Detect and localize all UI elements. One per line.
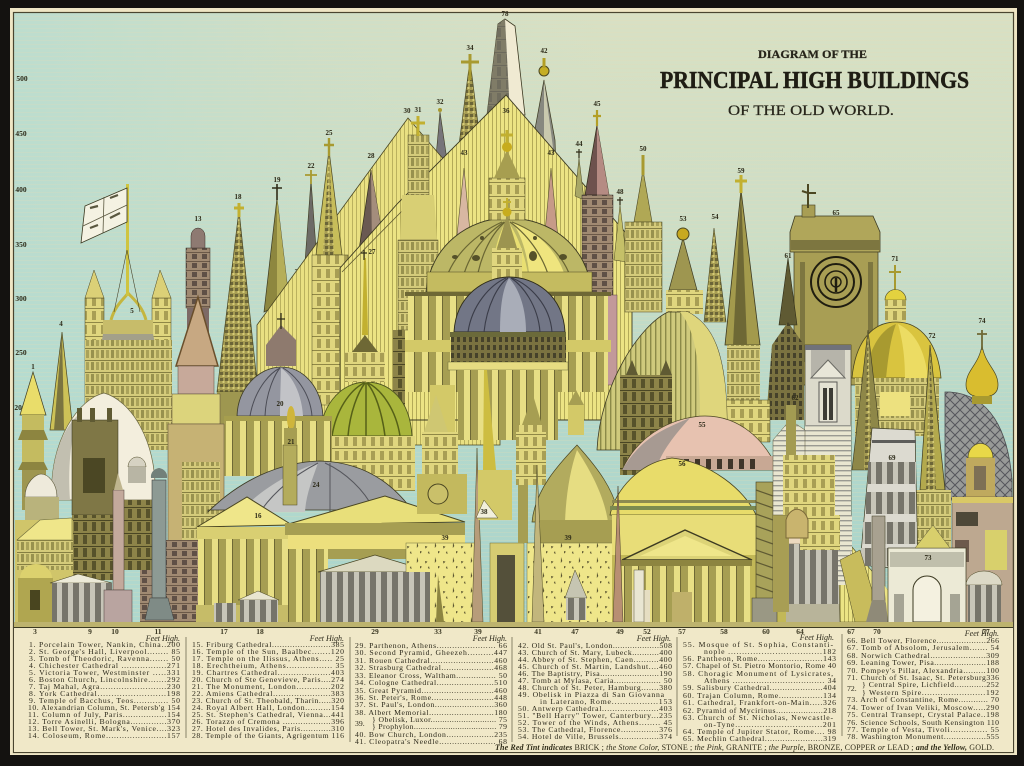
46 Baptistry dome: [532, 390, 620, 545]
13 Bell Tower St Mark's brick: 13: [194, 215, 202, 223]
legend column 3: 36. St. Peter's, Rome.........................448: [355, 693, 507, 702]
Dome of St Peter's Rome: 36: [502, 107, 510, 115]
building index numbers along ground: 18: [256, 627, 264, 636]
legend column 3: 40. Bow Church, London...................235: [355, 730, 507, 739]
28 spire on second pyramid: 28: [368, 152, 375, 160]
11 Column of July: [145, 468, 174, 620]
legend column 1: 5. Victoria Tower, Westminster .....331: [29, 668, 180, 677]
legend column 4: 51. "Bell Harry" Tower, Canterbury...235: [518, 711, 672, 720]
50 Antwerp Cathedral tower: 50: [640, 145, 647, 153]
19 Chartres spire: 19: [274, 176, 281, 184]
6 Boston Church tower: [72, 408, 118, 580]
64 Temple of Jupiter Stator: [786, 515, 844, 622]
45 Church of St Martin Landshut: [582, 100, 617, 385]
legend column 2: 16. Temple of the Sun, Baalbec.......120: [192, 647, 344, 656]
48 Church of St Peter Hamburg spire and side panel: 48: [616, 188, 624, 196]
4 Chichester spire: 4: [59, 320, 63, 328]
height scale: 400: [15, 185, 27, 194]
legend column 1: 8. York Cathedral.........................198: [29, 689, 180, 698]
legend column 6: 70. Pompey's Pillar, Alexandria.........100: [847, 666, 999, 675]
73 Arch of Constantine: 73: [924, 554, 932, 562]
building index numbers along ground: 47: [571, 627, 579, 636]
legend column 6: 73. Arch of Constantine, Rome............ 70: [847, 695, 999, 704]
building index numbers along ground: 9: [88, 627, 92, 636]
legend column 1: 14. Coloseum, Rome.......................157: [28, 731, 180, 740]
57 arched dome Church of St Peter: [597, 312, 727, 475]
legend column 2: 27. Hotel des Invalides, Paris............310: [192, 724, 344, 733]
49 Obelisk and 33 Eleanor Cross: [472, 448, 483, 622]
legend column 4: 43. Church of St. Mary, Lubeck...........400: [518, 648, 672, 657]
legend column 6: 77. Temple of Vesta, Tivoli.............. 55: [847, 725, 999, 734]
22 Amiens spire: 22: [308, 162, 315, 170]
legend column 2: 28. Temple of the Giants, Agrigentum 116: [192, 731, 344, 740]
39 Obelisk Luxor and Propylon left panel: 39: [442, 534, 449, 542]
18 Church of St Theobald spire: 18: [234, 193, 242, 201]
37 St Paul's dome and drum: [430, 277, 568, 445]
legend column 5: Feet High.: [799, 633, 834, 642]
74 Tower of Ivan Veliki: [966, 317, 998, 404]
legend column 5: nople ..................................182: [704, 647, 836, 656]
legend column 6: 76. Science Schools, South Kensington 110: [847, 718, 999, 727]
building index numbers along ground: 10: [111, 627, 119, 636]
legend column 3: Feet High.: [472, 634, 507, 643]
title block: DIAGRAM OF THE: [758, 47, 867, 61]
legend column 1: 13. Bell Tower, St. Mark's, Venice....323: [28, 724, 180, 733]
23 spire: 23: [294, 268, 302, 276]
ground line: [14, 622, 1013, 627]
building index numbers along ground: 60: [762, 627, 770, 636]
legend column 3: 35. Great Pyramid.............................460: [355, 686, 507, 695]
13 Bell Tower St Mark's brick: [172, 215, 220, 424]
legend column 1: 11. Column of July, Paris.................154: [28, 710, 180, 719]
legend column 3: } Prophylon.................................... 79: [372, 722, 507, 731]
legend column 3: 29. Parthenon, Athens....................... 66: [355, 641, 507, 650]
legend column 6: 78. Washington Monument.................555: [847, 732, 999, 741]
75 Crystal Palace transept: [945, 392, 1012, 500]
55 Mosque of St Sophia: 55: [698, 421, 706, 429]
legend column 3: 41. Cleopatra's Needle...................... 68: [355, 737, 507, 746]
flag and pole: [81, 184, 140, 312]
1 Porcelain Tower: 1: [31, 363, 35, 371]
42 Old St Paul's spire: 42: [540, 47, 548, 55]
58 Choragic Monument: [634, 570, 644, 622]
14 Coloseum: [140, 424, 224, 622]
building index numbers along ground: 67: [847, 627, 855, 636]
35 Great Pyramid: [340, 95, 632, 420]
Tower beside Albert Memorial: [516, 395, 546, 543]
25 St Stephen's Vienna tower: [312, 129, 348, 405]
legend column 1: 1. Porcelain Tower, Nankin, China..200: [29, 640, 180, 649]
legend column 2: 22. Amiens Cathedral......................383: [192, 689, 344, 698]
building index numbers along ground: 52: [643, 627, 651, 636]
30 Second Pyramid: 30: [404, 107, 411, 115]
legend column 6: 68. Norwich Cathedral......................309: [847, 651, 999, 660]
legend column 2: 15. Friburg Cathedral.......................385: [192, 640, 344, 649]
height scale: 450: [15, 129, 27, 138]
legend column 1: 9. Temple of Bacchus, Teos............. 50: [29, 696, 180, 705]
20 Church of Ste Genevieve dome: 20: [276, 400, 284, 408]
building index numbers along ground: 17: [220, 627, 228, 636]
legend column 5: 59. Salisbury Cathedral.....................404: [683, 683, 836, 692]
18 Church of St Theobald spire: [217, 193, 258, 442]
31 Rouen Cathedral tower: 31: [414, 106, 422, 114]
39 Propylon right panel: 39: [564, 534, 572, 542]
legend column 1: Feet High.: [145, 634, 180, 643]
legend column 5: 58. Choragic Monument of Lysicrates,: [683, 669, 833, 678]
legend column 3: 37. St. Paul's, London........................360: [355, 700, 507, 709]
legend column 5: on-Tyne................................201: [704, 720, 836, 729]
59 Salisbury Cathedral spire: [717, 167, 770, 442]
building index numbers along ground: 64: [796, 627, 804, 636]
small yellow dome right: [966, 443, 995, 498]
building index numbers along ground: 58: [720, 627, 728, 636]
legend column 4: 54. Hotel de Ville, Brussels................374: [518, 732, 672, 741]
legend column 4: 53. The Cathedral, Florence...............376: [518, 725, 672, 734]
Temple of Erechtheum small temples 17 and 18: [214, 591, 279, 622]
76 Science Schools: [952, 497, 1013, 625]
47 Tomb at Mylasa: [565, 570, 587, 620]
1 Porcelain Tower: [18, 363, 48, 510]
40 Bow Church tower: [417, 395, 467, 514]
39 Obelisk Luxor and Propylon left panel: [320, 534, 475, 623]
69 Leaning Tower of Pisa: 69: [888, 454, 896, 462]
building index numbers along ground: 3: [33, 627, 37, 636]
legend column 6: 74. Tower of Ivan Veliki, Moscow.....290: [847, 703, 999, 712]
65 Mechlin Cathedral tower with clock: 65: [832, 209, 840, 217]
legend column 4: 48. Church of St. Peter, Hamburg.......380: [518, 683, 672, 692]
61 Cathedral Frankfort: 61: [784, 252, 792, 260]
45 Church of St Martin Landshut: 45: [594, 100, 601, 108]
legend column 4: Feet High.: [636, 634, 671, 643]
62 Pyramid of Mycerinus slope: [838, 530, 914, 622]
77 Temple of Vesta: [966, 571, 1002, 622]
legend column 6: 66. Bell Tower, Florence....................266: [847, 636, 999, 645]
10 Alexandrian Column: [104, 473, 132, 624]
inner lantern of St Paul's: [492, 198, 522, 280]
legend column 3: 31. Rouen Cathedral.........................460: [355, 656, 507, 665]
legend column 5: 57. Chapel of St. Pietro Montorio, Rome 40: [683, 661, 836, 670]
60 Trajan Column: [752, 482, 789, 623]
legend column 2: [192, 634, 344, 740]
61 Cathedral Frankfort: [766, 252, 804, 420]
72 Lichfield spire: [915, 332, 951, 550]
56 Pantheon dome: [610, 458, 756, 515]
24 Royal Albert Hall dome: [208, 461, 412, 512]
legend column 1: 2. St. George's Hall, Liverpool........ 85: [29, 647, 180, 656]
71 Church of St Isaac dome: 71: [892, 255, 899, 263]
legend column 2: 25. St. Stephen's Cathedral, Vienna...441: [192, 710, 344, 719]
44 Abbey of St Stephen spire: [575, 140, 584, 200]
44 Abbey of St Stephen spire: 44: [576, 140, 583, 148]
legend column 5: Athens ................................... 34: [704, 676, 836, 685]
42 Old St Paul's spire: [533, 47, 556, 170]
St Peter's drum and colonnade: [405, 272, 611, 392]
legend column 2: 20. Church of Ste Genevieve, Paris....274: [192, 675, 344, 684]
legend column 5: 62. Pyramid of Mycirinus...................218: [683, 706, 836, 715]
Dome of St Peter's Rome: [426, 107, 592, 292]
53 Cathedral Florence lantern: [666, 215, 703, 314]
building index numbers along ground: 49: [616, 627, 624, 636]
legend column 3: 30. Second Pyramid, Gheezeh..........447: [355, 648, 507, 657]
54 Hotel de Ville Brussels spire: [704, 213, 726, 322]
65 Mechlin Cathedral tower with clock: [790, 184, 880, 385]
height scale: 500: [16, 74, 28, 83]
dome beside tower 8: [122, 457, 152, 570]
56 Pantheon dome: 56: [678, 460, 686, 468]
legend column 6: 67. Tomb of Absolom, Jerusalem....... 54: [847, 643, 999, 652]
72 spire small gable beside arch: [915, 525, 950, 548]
5 Victoria Tower: 5: [130, 307, 134, 315]
legend column 6: Feet High.: [964, 629, 999, 638]
small white dome: [25, 474, 59, 521]
legend column 4: 50. Antwerp Cathedral......................403: [518, 704, 672, 713]
legend column 5: 56. Pantheon, Rome.........................143: [683, 654, 836, 663]
74 Tower of Ivan Veliki: 74: [978, 317, 986, 325]
49 Obelisk San Giovanni: [613, 486, 623, 622]
56 Pantheon portico: [612, 515, 787, 623]
legend column 6: } Western Spire........................192: [862, 688, 999, 697]
height scale: 200: [14, 403, 26, 412]
height scale: [14, 74, 28, 412]
28 spire on second pyramid: [358, 152, 386, 280]
legend column 1: 7. Taj Mahal, Agra.........................230: [29, 682, 180, 691]
legend column 5: 60. Trajan Column, Rome.................134: [683, 691, 836, 700]
legend column 2: 18. Erechtheium, Athens................. 35: [192, 661, 344, 670]
legend column 2: 21. The Monument, London.............202: [192, 682, 344, 691]
legend column 4: 46. The Baptistry, Pisa........................190: [518, 669, 672, 678]
26 Torazzo green dome: [320, 248, 415, 491]
70 Pompey's Pillar: [866, 516, 912, 622]
legend column 4: 42. Old St. Paul's, London...................508: [518, 641, 672, 650]
legend column 2: 17. Temple on the Ilissus, Athens..... 25: [192, 654, 344, 663]
legend column 2: 24. Royal Albert Hall, London..........154: [192, 703, 344, 712]
legend panel: [14, 627, 1013, 752]
19 Chartres spire: [264, 176, 289, 312]
21 The Monument: 21: [288, 438, 295, 446]
Yellow tower 14 and 62 group: [783, 455, 840, 550]
legend column 3: 33. Eleanor Cross, Waltham................ 50: [355, 671, 507, 680]
63 Church of St Nicholas Newcastle: 62: [792, 394, 799, 402]
building index numbers along ground: [33, 627, 990, 636]
72 Lichfield spire: 72: [928, 332, 936, 340]
legend column 3: 34. Cologne Cathedral.......................510: [355, 678, 507, 687]
16 Temple of the Sun: [196, 497, 294, 623]
4 Chichester spire: [50, 320, 73, 430]
title block: PRINCIPAL HIGH BUILDINGS: [660, 68, 969, 94]
34 Cologne Cathedral spire: 34: [466, 44, 474, 52]
43 St Mary Lubeck spires: 43: [460, 149, 468, 157]
legend column 1: 3. Tomb of Theodoric, Ravenna....... 50: [29, 654, 180, 663]
50 Antwerp Cathedral tower: [625, 145, 662, 312]
legend column 1: 4. Chichester Cathedral .................271: [29, 661, 180, 670]
legend column 2: 23. Church of St. Theobald, Tharin.....320: [192, 696, 344, 705]
legend column 3: [355, 634, 507, 746]
legend column 5: 63. Church of St. Nicholas, Newcastle-: [683, 713, 833, 722]
66 Bell Tower Florence: [805, 345, 862, 600]
9 Temple of Bacchus: [50, 574, 112, 622]
67 Tomb of Absolom: [840, 550, 872, 622]
59 Salisbury Cathedral spire: 59: [738, 167, 745, 175]
legend column 6: [847, 629, 999, 741]
54 Hotel de Ville Brussels spire: 54: [712, 213, 719, 221]
building index numbers along ground: 70: [873, 627, 881, 636]
colour key caption: The Red Tint indicates BRICK ; the Stone Color, STONE ; the Pink, GRANITE ; the Purple, BRONZE, COPPER or LEAD ; and the Yellow, GOLD.: [495, 743, 994, 752]
63 Church of St Nicholas Newcastle: [773, 394, 805, 515]
24 Royal Albert Hall dome: 24: [312, 481, 320, 489]
38 Albert Memorial: [476, 370, 524, 623]
53 Cathedral Florence lantern: 53: [680, 215, 687, 223]
68 Norwich Cathedral spire: [852, 330, 884, 470]
legend column 2: 26. Torazzo of Cremona ...................396: [192, 717, 344, 726]
32 Strasburg spire: [435, 98, 447, 168]
5 Victoria Tower: [81, 184, 172, 450]
legend column 3: 38. Albert Memorial..........................180: [355, 708, 507, 717]
legend column 5: 55. Mosque of St. Sophia, Constanti-: [683, 640, 833, 649]
legend column 1: 6. Boston Church, Lincolnshire.......292: [29, 675, 180, 684]
building index numbers along ground: 39: [474, 627, 482, 636]
legend column 5: 65. Mechlin Cathedral.......................319: [683, 734, 836, 743]
legend column 2: Feet High.: [309, 634, 344, 643]
legend column 3: 39.: [355, 719, 365, 728]
25 St Stephen's Vienna tower: 25: [326, 129, 333, 137]
78 Washington Monument obelisk: [487, 10, 525, 115]
29 Parthenon facade and second pediment: [285, 496, 470, 623]
building index numbers along ground: 41: [534, 627, 542, 636]
building index numbers along ground: 11: [154, 627, 162, 636]
31 Rouen Cathedral tower: [393, 106, 438, 410]
legend column 3: 32. Strasburg Cathedral.....................468: [355, 663, 507, 672]
title block: OF THE OLD WORLD.: [728, 103, 894, 119]
48 Church of St Peter Hamburg spire and side panel: [614, 188, 627, 262]
legend column 6: } Central Spire, Lichfield.............252: [862, 680, 999, 689]
43 St Mary Lubeck spires: 43: [548, 149, 555, 157]
legend column 6: 75. Central Transept, Crystal Palace..198: [847, 710, 999, 719]
height scale: 250: [15, 348, 27, 357]
78 Washington Monument obelisk: 78: [502, 10, 509, 18]
71 Church of St Isaac dome: [852, 255, 941, 436]
2 and 3 low left buildings: [15, 518, 73, 622]
34 Cologne Cathedral spire: [456, 44, 481, 168]
clock face: [811, 257, 861, 307]
legend column 6: 69. Leaning Tower, Pisa.....................188: [847, 658, 999, 667]
legend column 6: 71. Church of St. Isaac, St. Petersburg336: [847, 673, 999, 682]
legend column 4: 52. Tower of the Winds, Athens........ 45: [518, 718, 672, 727]
legend column 6: 72.: [847, 684, 857, 693]
building index numbers along ground: 57: [678, 627, 686, 636]
building index numbers along ground: 29: [371, 627, 379, 636]
legend column 5: [683, 633, 836, 743]
height scale: 350: [15, 240, 27, 249]
legend column 4: [518, 634, 672, 741]
22 Amiens spire: [305, 162, 317, 262]
38 Albert Memorial: 38: [480, 508, 488, 516]
legend column 4: 45. Church of St. Martin, Landshut....460: [518, 662, 672, 671]
legend column 5: 61. Cathedral, Frankfort-on-Main.....326: [683, 698, 836, 707]
23 spire: [289, 268, 306, 372]
legend column 4: 49. Obelisk in Piazza di San Giovanna: [518, 690, 665, 699]
legend column 1: 10. Alexandrian Column, St. Petersb'g 154: [28, 703, 180, 712]
title block: [660, 47, 969, 119]
21 The Monument: [283, 406, 297, 505]
legend column 1: 12. Torre Asinelli, Bologna..............370: [28, 717, 180, 726]
20 Church of Ste Genevieve dome: [224, 313, 332, 476]
30 Second Pyramid: [257, 107, 500, 445]
legend column 5: 64. Temple of Jupiter Stator, Rome.... 98: [683, 727, 836, 736]
building index numbers along ground: 33: [434, 627, 442, 636]
43 St Mary Lubeck spires: [457, 149, 558, 238]
26 Torazzo green dome: 27: [368, 248, 376, 256]
16 Temple of the Sun: 16: [254, 512, 262, 520]
building index numbers along ground: 77: [982, 627, 990, 636]
39 Propylon right panel: [527, 465, 615, 623]
7 Taj Mahal white dome: [52, 393, 155, 500]
32 Strasburg spire: 32: [436, 98, 444, 106]
69 Leaning Tower of Pisa: [860, 428, 918, 570]
legend column 4: in Laterano, Rome.................153: [540, 697, 672, 706]
legend column 1: [28, 634, 180, 740]
legend column 4: 47. Tomb at Mylasa, Caria................... 50: [518, 676, 672, 685]
29 Parthenon: [318, 555, 432, 622]
legend column 2: 19. Chartres Cathedral....................403: [192, 668, 344, 677]
height scale: 300: [15, 294, 27, 303]
55 Mosque of St Sophia: [622, 416, 778, 470]
legend column 4: 44. Abbey of St. Stephen, Caen..........400: [518, 655, 672, 664]
legend column 3: } Obelisk, Luxor............................ 75: [372, 715, 507, 724]
73 Arch of Constantine: [888, 548, 966, 623]
